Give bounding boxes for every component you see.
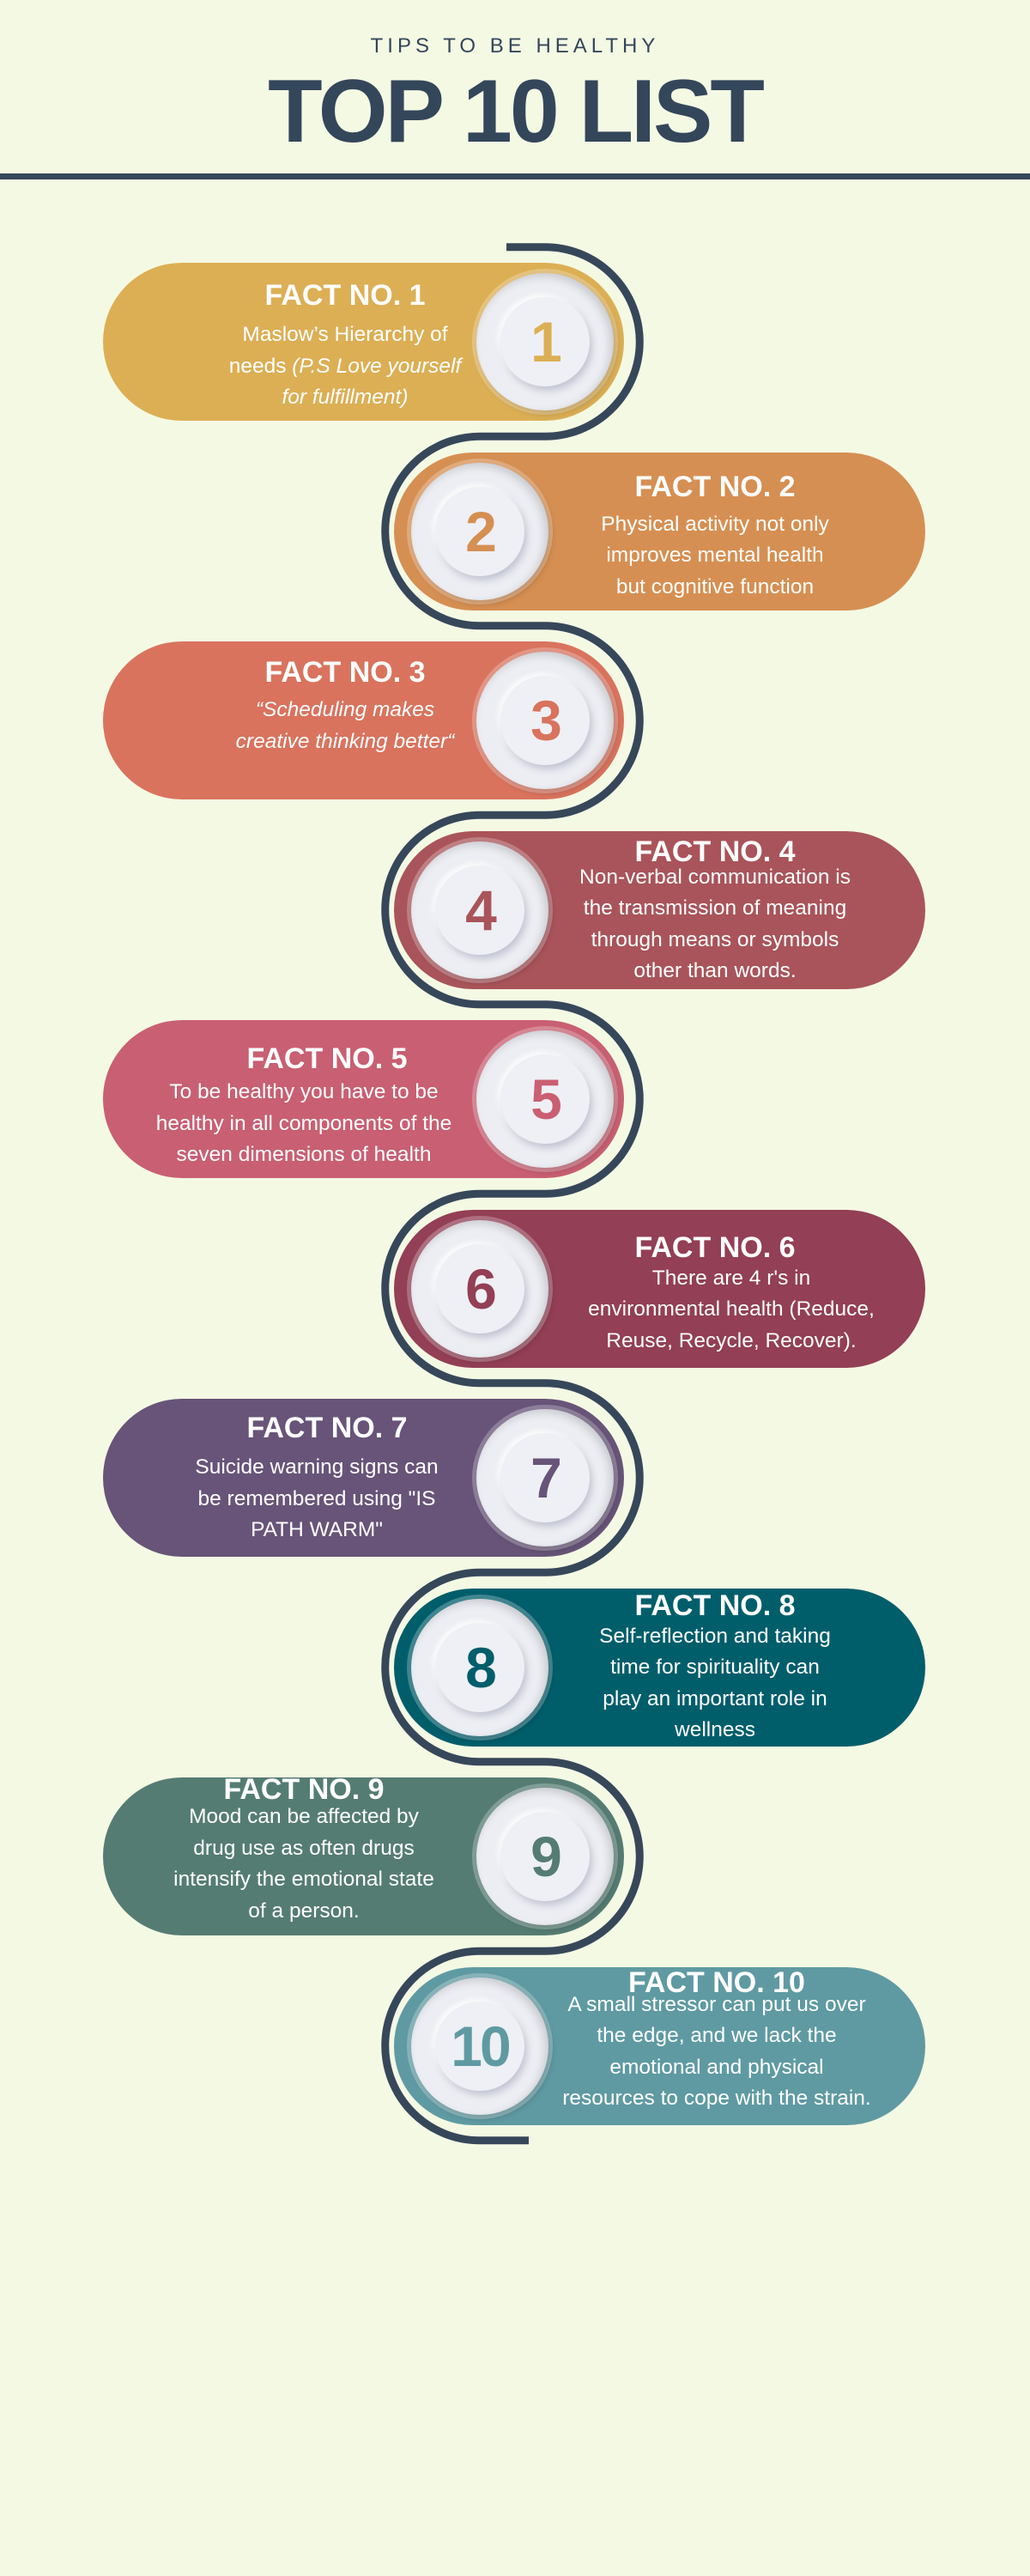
fact 10: FACT NO. 10 [628,1966,805,1999]
fact 9: Mood can be affected by [189,1805,419,1828]
title: TOP 10 LIST [268,62,762,161]
fact 7: be remembered using "IS [197,1487,435,1510]
fact 1: for fulfillment) [282,386,409,409]
fact 4: Non-verbal communication is [579,866,851,888]
fact 6: FACT NO. 6 [634,1231,796,1264]
fact 6: Reuse, Recycle, Recover). [606,1329,857,1352]
fact 7: PATH WARM" [251,1518,383,1541]
fact 3: creative thinking better“ [236,730,454,752]
subtitle: TIPS TO BE HEALTHY [371,34,659,58]
fact 3 [103,641,624,799]
fact 8: 8 [465,1635,494,1698]
fact 7: 7 [530,1446,560,1510]
fact 6: 6 [465,1257,494,1321]
fact 9: FACT NO. 9 [223,1773,385,1806]
fact 10: resources to cope with the strain. [562,2087,871,2110]
fact 6: environmental health (Reduce, [588,1297,875,1321]
fact 3: FACT NO. 3 [264,656,426,689]
fact 10: the edge, and we lack the [597,2024,837,2047]
fact 10: 10 [451,2014,509,2078]
fact 6 [394,1210,925,1368]
fact 9: 9 [530,1825,560,1888]
fact 2 [394,453,925,611]
fact 6: There are 4 r's in [652,1266,810,1290]
fact 8: time for spirituality can [610,1656,820,1679]
fact 2: 2 [465,500,494,563]
fact 7: FACT NO. 7 [246,1412,408,1444]
fact 10: A small stressor can put us over [567,1992,866,2016]
fact 8: play an important role in [603,1686,827,1710]
fact 2: but cognitive function [616,575,814,598]
fact 10: emotional and physical [609,2056,824,2078]
fact 9 [103,1773,624,1935]
fact 10 [394,1966,925,2125]
fact 1: Maslow’s Hierarchy of [242,323,448,346]
fact 9: drug use as often drugs [193,1836,415,1860]
fact 5: seven dimensions of health [177,1143,431,1166]
fact 9: of a person. [248,1899,360,1922]
fact 7 [103,1399,624,1557]
fact 3: “Scheduling makes [256,698,434,721]
fact 4: 4 [465,878,494,941]
fact 5: healthy in all components of the [156,1111,451,1135]
fact 3: 3 [530,689,560,752]
fact 4: other than words. [633,959,797,982]
fact 1 [103,263,624,421]
fact 5: 5 [530,1067,560,1131]
fact 9: intensify the emotional state [173,1868,434,1891]
fact 4 [394,831,925,989]
fact 8: wellness [675,1718,755,1741]
fact 8: Self-reflection and taking [599,1625,831,1647]
fact 4: FACT NO. 4 [634,835,796,867]
fact 2: Physical activity not only [601,512,829,536]
fact 4: the transmission of meaning [584,896,846,920]
fact 2: improves mental health [606,544,824,567]
fact 4: through means or symbols [591,927,839,951]
fact 7: Suicide warning signs can [195,1455,439,1479]
fact 2: FACT NO. 2 [634,471,796,503]
fact 1: needs (P.S Love yourself [229,354,461,378]
fact 5: To be healthy you have to be [169,1080,439,1103]
fact 8: FACT NO. 8 [634,1589,796,1621]
fact 8 [394,1589,925,1747]
fact 5: FACT NO. 5 [246,1042,408,1075]
fact 5 [103,1020,624,1178]
fact 1: 1 [530,310,560,374]
fact 1: FACT NO. 1 [264,279,426,312]
